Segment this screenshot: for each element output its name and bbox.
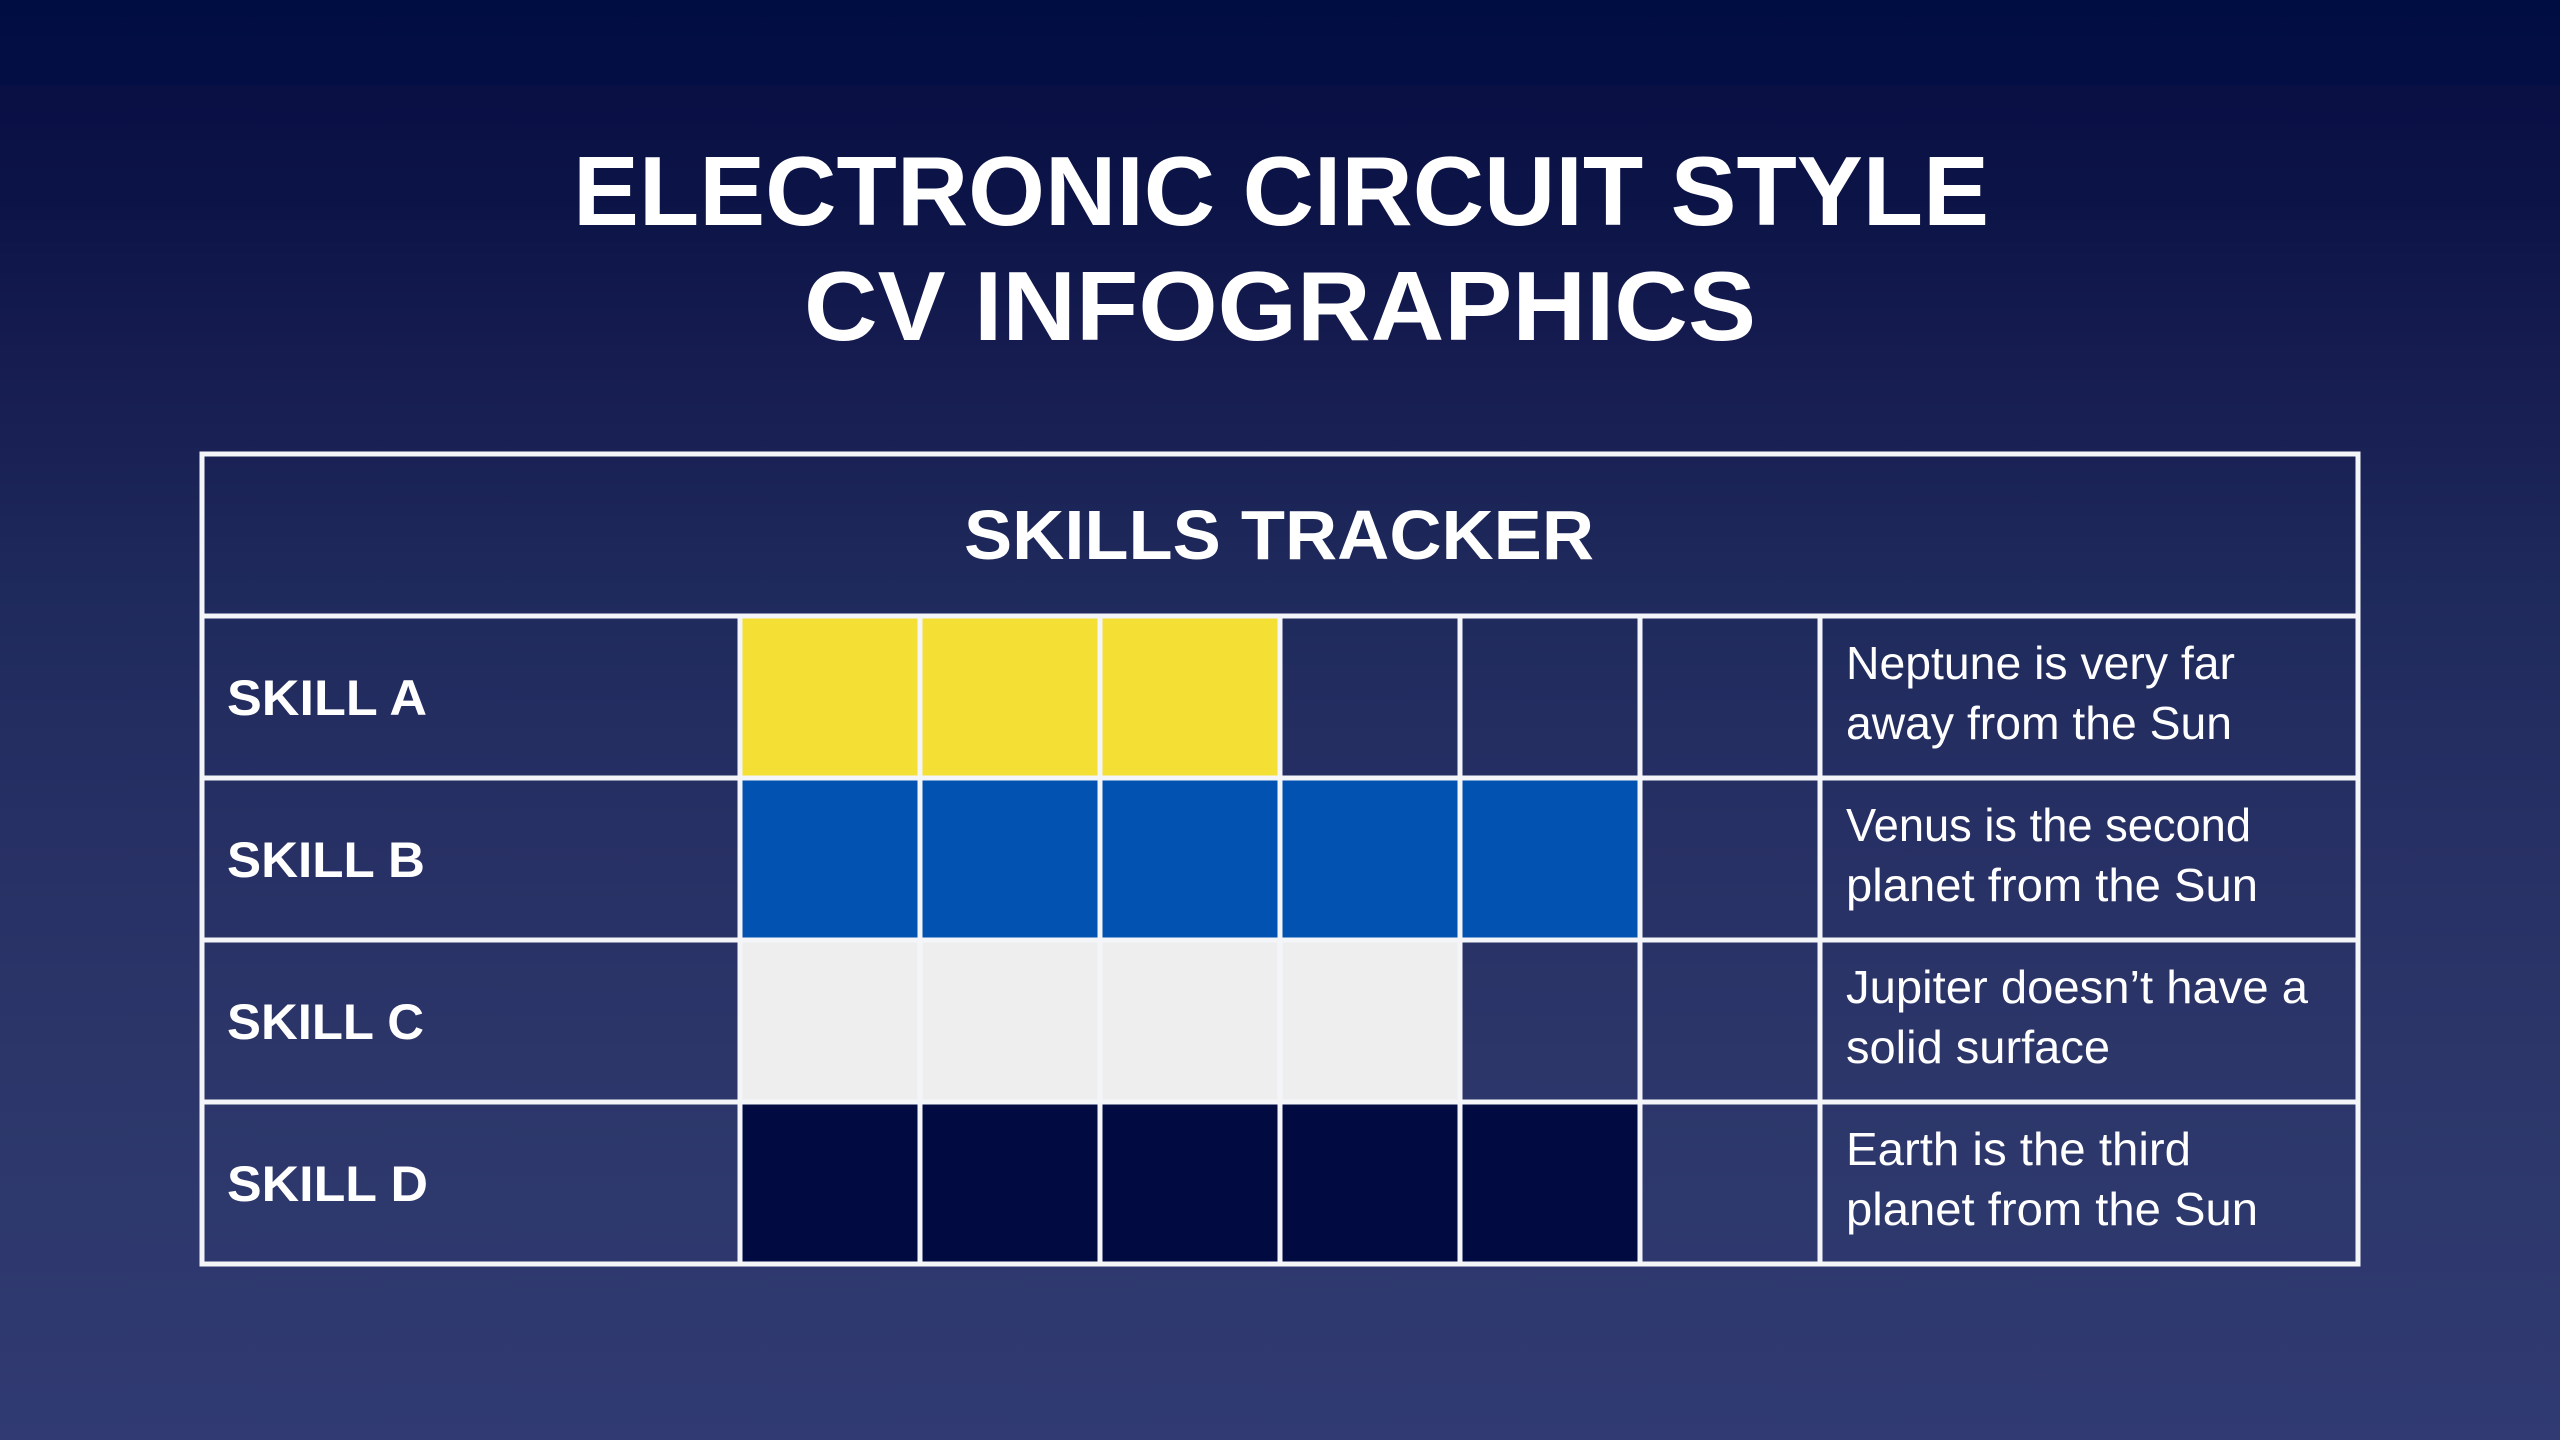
skill descriptions xyxy=(1846,637,2308,1235)
heading: skills tracker: SKILLS TRACKER xyxy=(964,496,1594,574)
skills tracker table xyxy=(202,454,2358,1264)
skill labels xyxy=(227,670,428,1212)
title: ELECTRONIC CIRCUIT STYLE xyxy=(573,136,1989,246)
skill descriptions: away from the Sun xyxy=(1846,697,2232,749)
title xyxy=(573,136,1989,361)
skill descriptions: planet from the Sun xyxy=(1846,859,2258,911)
skill descriptions: solid surface xyxy=(1846,1021,2110,1073)
skill labels: SKILL C xyxy=(227,994,424,1050)
row: skill D level cells xyxy=(740,1102,1640,1264)
skill descriptions: Neptune is very far xyxy=(1846,637,2235,689)
row: skill A level cells xyxy=(740,616,1280,778)
skill labels: SKILL D xyxy=(227,1156,428,1212)
title: CV INFOGRAPHICS xyxy=(804,251,1756,361)
skill descriptions: Earth is the third xyxy=(1846,1123,2191,1175)
skill descriptions: Jupiter doesn’t have a xyxy=(1846,961,2308,1013)
skill descriptions: planet from the Sun xyxy=(1846,1183,2258,1235)
row: skill C level cells xyxy=(740,940,1460,1102)
skill descriptions: Venus is the second xyxy=(1846,799,2251,851)
skill labels: SKILL A xyxy=(227,670,427,726)
row: skill B level cells xyxy=(740,778,1640,940)
skill labels: SKILL B xyxy=(227,832,425,888)
